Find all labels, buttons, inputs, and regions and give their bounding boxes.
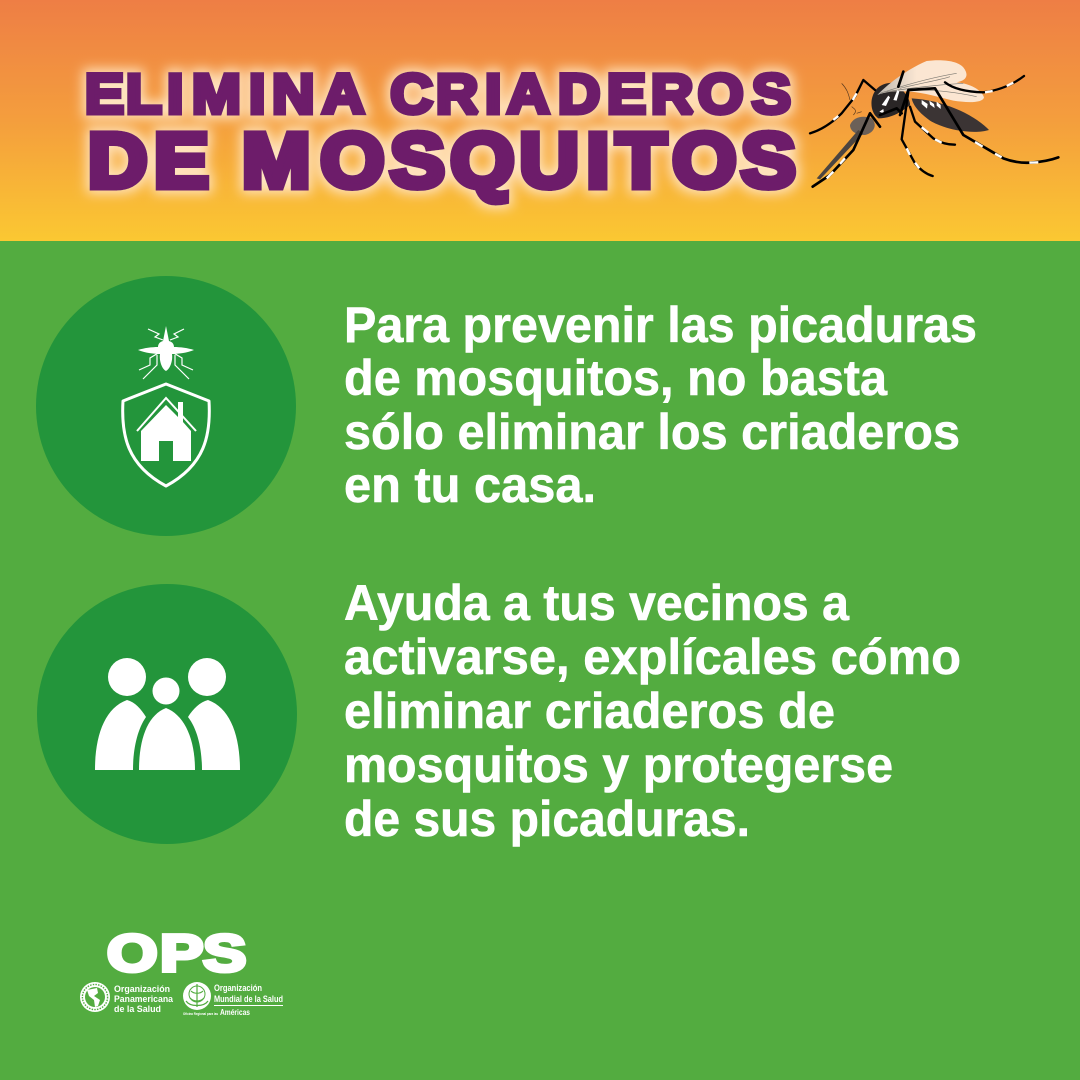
text block: prevention message: de mosquitos, no basta (344, 350, 888, 406)
icon circle (36, 276, 296, 536)
title (85, 63, 796, 203)
logo: WHO name: Organización (214, 983, 262, 993)
logo: PAHO name: Panamericana (114, 994, 174, 1005)
title: ELIMINA CRIADEROS (85, 63, 791, 126)
logo: WHO name: Oficina Regional para las (183, 1011, 219, 1016)
text block: neighbours message: mosquitos y protegerse (344, 737, 893, 793)
logo: WHO name (183, 983, 283, 1017)
icon: mosquito illustration (810, 60, 1058, 187)
logo: WHO emblem (183, 982, 211, 1010)
text block: neighbours message: Ayuda a tus vecinos a (344, 575, 850, 631)
text block: neighbours message (344, 575, 961, 847)
logo: PAHO name (114, 984, 174, 1015)
text block: neighbours message: eliminar criaderos de (344, 683, 835, 739)
panel: house protection icon (36, 276, 296, 536)
icon: shield (123, 384, 209, 486)
logo: PAHO name: de la Salud (114, 1004, 161, 1015)
logo: OPS (80, 925, 283, 1017)
icon: house (141, 402, 191, 461)
panel: community icon (37, 584, 297, 844)
icon: house roof (137, 398, 196, 431)
logo: PAHO name: Organización (114, 984, 170, 995)
text block: prevention message: en tu casa. (344, 457, 596, 513)
text block: neighbours message: activarse, explícales cómo (344, 629, 961, 685)
logo: PAHO emblem (80, 982, 110, 1012)
logo: WHO name: Mundial de la Salud (214, 994, 283, 1004)
title: DE MOSQUITOS (88, 117, 796, 203)
header band (0, 0, 1080, 241)
icon: group of people (95, 658, 240, 770)
logo: WHO name: Américas (220, 1008, 250, 1017)
text block: prevention message: Para prevenir las picaduras (344, 297, 977, 353)
text block: prevention message (344, 297, 977, 513)
icon circle (37, 584, 297, 844)
logo wordmark: OPS (107, 925, 246, 982)
text block: prevention message: sólo eliminar los criaderos (344, 404, 960, 460)
icon: small mosquito (138, 326, 194, 379)
text block: neighbours message: de sus picaduras. (344, 791, 750, 847)
